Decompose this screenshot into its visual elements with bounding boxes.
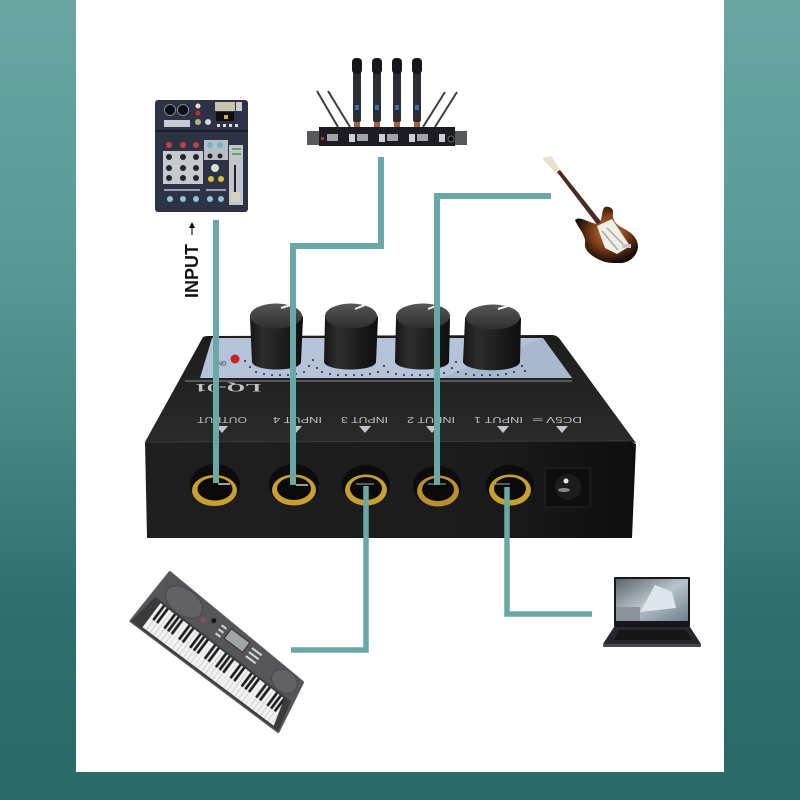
port labels: OUTPUT	[197, 415, 247, 425]
jack: output	[190, 464, 240, 506]
input label with arrow: INPUT	[182, 244, 202, 298]
jack: input 2	[413, 466, 461, 506]
connector line: guitar to input 2	[437, 196, 551, 485]
connector line: keyboard to input 3	[291, 486, 366, 650]
jack: input 3	[342, 465, 390, 506]
device top surface	[145, 335, 636, 443]
port labels: INPUT 3	[341, 415, 388, 425]
audio mixer device LQ-01	[145, 304, 636, 538]
device front face	[145, 441, 636, 538]
power LED	[218, 354, 240, 365]
DC power socket	[545, 468, 590, 507]
knob 2	[324, 304, 378, 370]
power LED: ON	[218, 359, 226, 365]
connector line: laptop to input 1	[507, 487, 592, 614]
icon: wireless microphones and receiver	[307, 58, 467, 146]
icon: electric guitar	[542, 156, 638, 263]
icon: audio mixer	[155, 100, 248, 212]
jack: input 1	[486, 465, 534, 506]
port labels: INPUT 4	[273, 415, 322, 425]
jack: input 4	[269, 464, 319, 506]
port labels: INPUT 1	[474, 415, 523, 425]
knob 4	[463, 304, 521, 370]
port labels: INPUT 2	[407, 415, 455, 425]
icon: electronic keyboard	[131, 571, 315, 731]
connector line: microphones to input 4	[293, 157, 381, 485]
port arrows	[216, 426, 568, 433]
model name: LQ-01	[195, 381, 261, 395]
white panel	[76, 0, 724, 772]
port labels	[197, 415, 582, 425]
perforated dots	[244, 359, 526, 376]
icon: laptop	[603, 577, 701, 647]
connector line: mixer to output	[213, 220, 219, 483]
port labels: DC5V ═	[531, 415, 582, 425]
knob 3	[395, 304, 450, 370]
knob 1	[250, 304, 303, 370]
control plate	[200, 338, 572, 378]
